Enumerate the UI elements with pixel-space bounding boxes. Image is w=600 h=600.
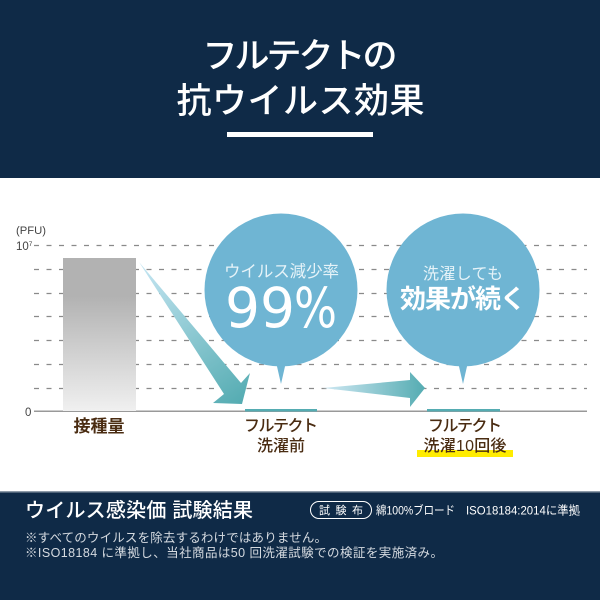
test fabric pill: 試験布	[319, 503, 363, 517]
fabric spec: 綿100%ブロード	[376, 502, 455, 518]
bubble: effect lasts: 洗濯しても	[423, 265, 503, 283]
y axis top label: 10	[16, 241, 29, 253]
standard spec: ISO18184:2014に準拠	[466, 502, 580, 518]
bar: inoculum	[63, 258, 136, 411]
category labels: 接種量	[74, 417, 124, 436]
title: フルテクトの	[202, 37, 398, 76]
bar: after 10 washes	[427, 409, 500, 412]
bubble: 99% reduction: ウイルス減少率	[224, 262, 339, 281]
footer band	[0, 491, 600, 600]
bubble: effect lasts	[386, 214, 540, 384]
bar: before wash	[245, 409, 317, 412]
header band	[0, 0, 600, 178]
category labels: フルテクト	[244, 417, 318, 435]
y axis top label: 7	[29, 241, 33, 248]
bubble: 99% reduction: %	[294, 276, 337, 340]
category labels: 洗濯前	[257, 437, 305, 455]
bubble: 99% reduction	[204, 214, 358, 384]
arrow: down to before wash	[139, 262, 250, 404]
unit label: (PFU)	[16, 225, 46, 237]
footnote 1: ※すべてのウイルスを除去するわけではありません。	[25, 531, 327, 545]
title underline	[227, 132, 373, 137]
highlight	[417, 450, 513, 457]
bubble: 99% reduction: 99	[225, 276, 295, 340]
category labels: 洗濯10回後	[424, 437, 506, 455]
title	[176, 37, 424, 121]
footnote 2: ※ISO18184 に準拠し、当社商品は50 回洗濯試験での検証を実施済み。	[25, 545, 443, 560]
bubble: effect lasts: 効果が続く	[400, 284, 526, 314]
footer heading: ウイルス感染価 試験結果	[25, 498, 253, 522]
category labels	[74, 417, 513, 457]
title: 抗ウイルス効果	[176, 82, 424, 121]
test fabric pill	[310, 502, 372, 518]
y axis zero label: 0	[25, 407, 31, 419]
category labels: フルテクト	[428, 417, 502, 435]
chart	[16, 214, 587, 457]
arrow: to after wash	[323, 372, 425, 407]
